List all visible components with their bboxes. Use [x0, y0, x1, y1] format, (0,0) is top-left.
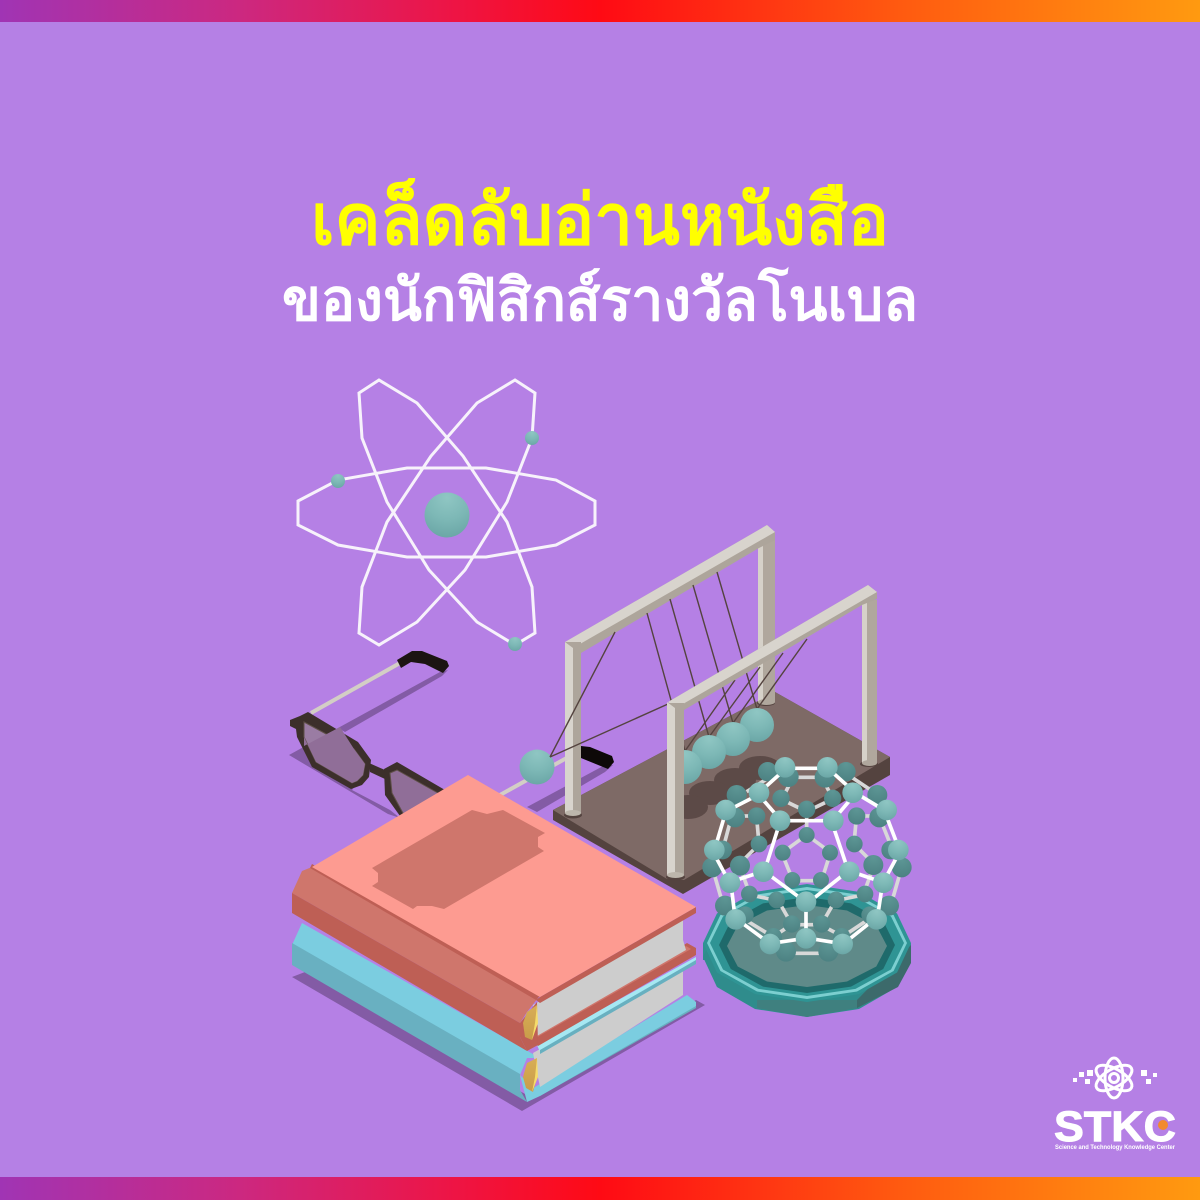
red book — [292, 775, 696, 1051]
front frame — [666, 585, 878, 880]
cradle base — [553, 692, 890, 894]
book shadow — [292, 972, 705, 1111]
STKC logo — [1054, 1058, 1176, 1151]
back frame — [564, 525, 775, 818]
ball shadows on base — [668, 756, 781, 819]
newton's cradle — [550, 525, 890, 894]
molecule — [702, 757, 912, 962]
front atoms — [704, 757, 909, 954]
logo wordmark: STKC — [1054, 1103, 1176, 1151]
title line 2: ของนักฟิสิกส์รางวัลโนเบล — [282, 265, 918, 333]
top gradient bar — [0, 0, 1200, 22]
strings — [550, 572, 807, 757]
title line 1: เคล็ดลับอ่านหนังสือ — [311, 177, 889, 259]
logo tagline: Science and Technology Knowledge Center — [1055, 1145, 1176, 1151]
back atoms — [702, 762, 912, 962]
cradle balls — [668, 708, 774, 784]
bottom gradient bar — [0, 1177, 1200, 1200]
book emblem — [372, 810, 545, 909]
title — [282, 177, 918, 333]
display tray — [703, 884, 911, 1017]
back bonds — [714, 775, 900, 953]
stack of books — [292, 775, 705, 1111]
atom illustration — [298, 380, 595, 651]
logo atom icon — [1092, 1058, 1136, 1098]
front bonds — [716, 768, 897, 943]
logo orange dot — [1158, 1120, 1168, 1130]
fullerene model — [702, 757, 912, 1017]
logo pixel squares — [1073, 1070, 1157, 1084]
blue book — [292, 923, 696, 1102]
glasses — [289, 651, 614, 818]
